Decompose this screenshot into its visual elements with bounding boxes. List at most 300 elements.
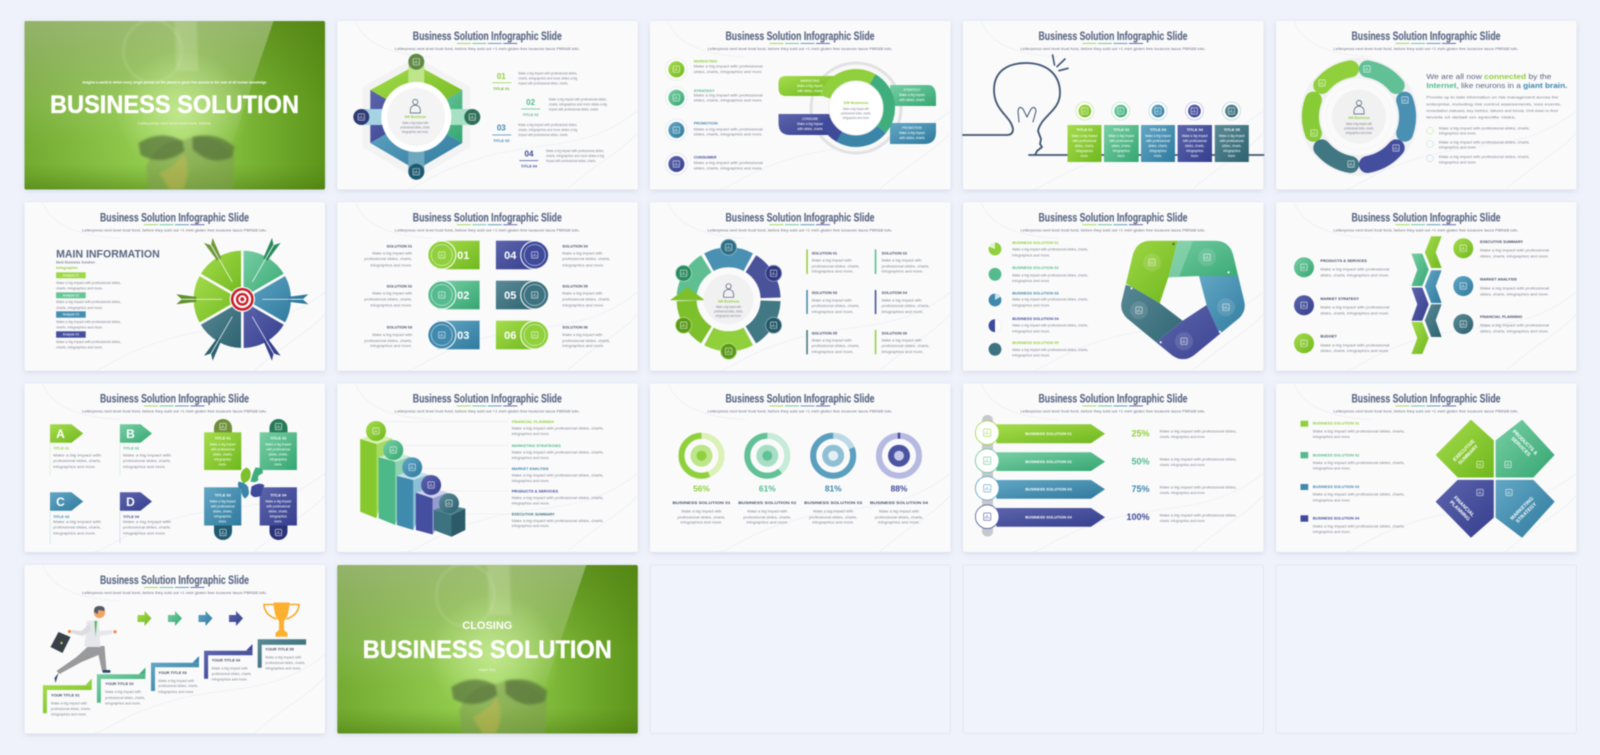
list: strategy [665,87,763,109]
title 02 box: TITLE 02 [1113,127,1130,132]
executive summary: Make a big impact with professional [1480,249,1549,253]
pie bullet 05: Make a big impact with professional slides, charts, [1012,348,1088,352]
solution 06 text: SOLUTION 06 [562,324,589,329]
solution 02 text: Make a big impact with [372,292,412,296]
title 01 box: more. [1080,154,1089,158]
donut 61%: Make a big impact with [747,510,787,514]
solution 05: SOLUTION 05 [812,330,838,335]
lightbulb outline [963,55,1264,155]
slide 5 header [1334,31,1519,51]
donut 88%: Make a big impact with [879,510,919,514]
step 04: YOUR TITLE 04 [212,658,241,663]
market analysis: MARKET ANALYSIS [1480,277,1517,282]
title 05 box: more. [1228,154,1236,158]
puzzle diagram: more. [219,520,227,524]
financial planning: Make a big impact with professional [1480,324,1549,328]
solution 05: infographics and more. [812,350,854,354]
item 02 [521,98,607,117]
main information heading: MAIN INFORMATION [56,248,160,260]
slide 4 header: Business Solution Infographic Slide [1038,31,1188,43]
solution 01: SOLUTION 01 [812,250,838,255]
cycle ring chart: infographics and more. [716,314,742,318]
slide 6: target and arrows [24,202,325,371]
bar 25%: 25% [1131,428,1150,438]
donut 81%: infographics and more. [812,521,854,525]
donut 61%: BUSINESS SOLUTION 02 [738,500,797,505]
financial planning text: infographics and more. [512,432,550,436]
bar 50%: charts, infographics and more. [1160,463,1206,467]
analysis 04: charts, infographics and more. [56,345,103,349]
step 01: Make a big impact with [51,702,87,706]
block 04: 04 [504,250,517,262]
solution 06 text: professional slides, charts, [562,339,610,343]
solution 02 text: infographics and more. [370,303,412,307]
target wheel [176,238,308,361]
solution 01: infographics and more. [812,270,854,274]
solution 06: Make a big impact with [882,338,922,342]
market analysis: Make a big impact with professional [1480,286,1549,290]
diamond executive summary: EXECUTIVE [1452,438,1477,463]
analysis 01 [56,272,121,290]
solution 06 text [562,324,610,348]
item 02: 02 [526,98,536,107]
statement body: enterprise, including risk control assessments, loss events, [1426,102,1561,106]
bar 25%: charts, infographics and more. [1160,435,1206,439]
step 05: infographics and more. [265,666,301,670]
bar 25%: Make a big impact with professional slides, [1160,430,1237,434]
pie bullet 04: BUSINESS SOLUTION 04 [1012,316,1060,321]
tag C: infographics and more. [53,532,96,536]
bar 75%: Make a big impact with professional slides, [1160,486,1237,490]
step 03 [151,656,199,694]
bar 50%: BUSINESS SOLUTION 02 [1025,459,1073,464]
checklist: infographics and more. [1439,145,1477,149]
donut 88%: BUSINESS SOLUTION 04 [870,500,929,505]
list item 02 [1300,452,1405,471]
step 02: professional slides, charts, [105,696,145,700]
step 03: Make a big impact with [158,679,194,683]
market strategy: slides, charts, infographics and more. [1320,311,1389,315]
tag C: Make a big impact with [53,520,101,524]
arrows into target [176,238,308,361]
marketing strategies text: Make a big impact with professional slides, charts, [512,450,604,454]
slide 4 header [1020,31,1206,51]
solution 06 text: infographics and more. [562,344,604,348]
block 02: 02 [457,290,469,302]
solution 06: infographics and more. [882,350,924,354]
bar 100%: charts, infographics and more. [1160,519,1206,523]
slide 3 header [708,31,893,51]
pie bullet 04: Make a big impact with professional slides, charts, [1012,324,1088,328]
title 04 box: TITLE 04 [1187,127,1204,132]
slide 14 header: Letterpress next level trust fund, before they sold out +1 meh gluten free locavore tacos PBR&B tofu. [1020,410,1206,414]
donut 61%: 61% [759,484,776,494]
block 03: 03 [457,330,469,342]
slide 7 header: Letterpress next level trust fund, before they sold out +1 meh gluten free locavore tacos PBR&B tofu. [395,229,580,233]
slide 15 header [1334,394,1519,414]
tag C: professional slides, charts, [53,526,101,530]
solution 01 [806,249,860,274]
solution 04 text: Make a big impact with [562,251,602,255]
tag C: TITLE 03 [53,514,70,519]
diamond products and services: PRODUCTS & [1511,429,1539,457]
vertical spine [982,415,993,536]
slide 13 header [708,394,893,414]
circular band diagram: SW Business [844,100,868,105]
puzzle diagram: slides, charts, [269,452,288,456]
tag C [50,492,101,544]
list: marketing: slides, charts, infographics and more. [694,70,763,74]
solution 01: professional slides, charts, [812,264,860,268]
marketing strategies text [512,443,604,460]
block 05: 05 [504,290,516,302]
marketing strategies text: infographics and more. [512,456,550,460]
slide 5: ring with statement [1276,21,1576,190]
slide 7 header: Business Solution Infographic Slide [413,212,562,224]
step 05 [258,639,306,670]
slide 13 header: Business Solution Infographic Slide [726,394,874,406]
ring chart: professional slides, charts, [1344,126,1374,130]
slide 4: lightbulb head [963,21,1264,190]
products and services text: Make a big impact with professional slides, charts, [512,496,604,500]
block 02 [428,281,480,309]
analysis 02: Analysis 02 [63,293,79,297]
financial planning: slides, charts, infographics and more. [1480,330,1549,334]
main information heading [56,248,160,270]
title 01 box: TITLE 01 [1076,127,1093,132]
tag C: C [56,495,65,509]
slide 2 header: Letterpress next level trust fund, before they sold out +1 meh gluten free locavore tacos PBR&B tofu. [395,47,580,51]
tag D: infographics and more. [123,532,166,536]
financial planning text: FINANCIAL PLANNING [512,419,554,424]
cycle ring chart: professional slides, charts, [714,309,743,313]
tag A [50,424,101,476]
step 02: infographics and more. [105,702,141,706]
analysis 03: Make a big impact with professional slides, [56,320,121,324]
slide 15 header: Business Solution Infographic Slide [1352,394,1500,406]
bar 75%: BUSINESS SOLUTION 03 [1025,487,1073,492]
slide 2: hexagon [337,21,638,190]
center icon [410,99,420,113]
title 04 box: infographics [1186,149,1204,153]
solution 04: Make a big impact with [882,298,922,302]
list item 01 [1300,421,1405,439]
slide 16 header: Letterpress next level trust fund, before they sold out +1 meh gluten free locavore tacos PBR&B tofu. [82,591,267,595]
slide 3: overlapping circle bands [650,21,950,190]
market analysis text: Make a big impact with professional slides, charts, [512,474,604,478]
budget: Make a big impact with professional [1320,343,1390,347]
checklist: Make a big impact with professional slides, charts, [1439,126,1530,130]
executive summary: EXECUTIVE SUMMARY [1480,239,1523,244]
slide 12: 3D staircase bars [337,384,638,552]
circular band diagram: Make a big impact [797,84,823,88]
list item 03: BUSINESS SOLUTION 03 [1313,484,1360,489]
list: consumer: Make a big impact with professional [694,161,763,165]
title 04 box: slides, charts, [1185,144,1205,148]
cover tagline: Imagine a world in which every single person on the planet is given free access to the sum of all human knowledge [82,80,267,84]
tag D [120,492,171,544]
circular band diagram: Make a big impact [899,93,925,97]
financial planning text: Make a big impact with professional slides, charts, [512,426,604,430]
pentagon diagram [1120,240,1246,360]
bar 50%: 50% [1131,456,1150,466]
executive summary: slides, charts, infographics and more. [1480,254,1549,258]
closing title: BUSINESS SOLUTION [363,636,612,664]
pie bullet 01: Make a big impact with professional slides, charts, [1012,248,1088,252]
tag B: infographics and more. [123,465,166,469]
statement body: remediation statuses, key metrics, failures and trends. Drill down to finer [1426,109,1559,113]
title 01 box [1068,125,1102,162]
market analysis text [512,466,604,483]
arrows row [138,611,243,626]
tag B: Make a big impact with [123,454,171,458]
step 02: Make a big impact with [105,690,141,694]
products and services text: PRODUCTS & SERVICES [512,489,559,494]
title 05 box: infographics [1223,149,1241,153]
step 01: YOUR TITLE 01 [51,692,80,697]
diamond marketing strategy: MARKETING [1509,496,1535,522]
circular band diagram: Make a big impact [797,122,823,126]
statement heading: We are all now connected by the [1426,72,1551,81]
tag B: professional slides, charts, [123,459,171,463]
list: strategy: slides, charts, infographics and more. [694,98,763,102]
slide 12 header: Letterpress next level trust fund, before they sold out +1 meh gluten free locavore tacos PBR&B tofu. [395,410,580,414]
solution 02: infographics and more. [882,270,924,274]
donut 81%: BUSINESS SOLUTION 03 [804,500,863,505]
title 02 box [1104,125,1139,162]
solution 05: professional slides, charts, [812,344,860,348]
tag D: D [126,495,135,509]
slide 12 header: Business Solution Infographic Slide [413,394,562,406]
item 04: impact with professional slides, charts. [546,159,596,163]
title 02 box: with professional [1109,139,1133,143]
puzzle diagram: Make a big impact [210,442,236,446]
step 04: professional slides, charts, [212,672,252,676]
slide 7: six solutions [337,202,638,371]
hexagon chart: SW Business [405,115,426,119]
circular band diagram: professional slides, charts, [841,112,871,116]
item 01: TITLE 01 [493,86,510,91]
slide 8 header: Letterpress next level trust fund, before they sold out +1 meh gluten free locavore tacos PBR&B tofu. [708,229,893,233]
puzzle diagram: infographics [270,458,287,462]
slide 8: cycle ring [650,202,950,371]
solution 03 text: Make a big impact with [372,333,412,337]
market analysis text: infographics and more. [512,479,550,483]
title 05 box: with professional [1220,139,1244,143]
solution 04 text [562,243,610,267]
slide 3 header: Letterpress next level trust fund, before they sold out +1 meh gluten free locavore tacos PBR&B tofu. [708,47,893,51]
step 03: YOUR TITLE 03 [158,670,188,675]
slide 5 header: Letterpress next level trust fund, before they sold out +1 meh gluten free locavore tacos PBR&B tofu. [1334,47,1519,51]
puzzle diagram: slides, charts, [213,510,233,514]
title 01 box: slides, charts, [1075,144,1094,148]
step 02 [97,668,145,706]
puzzle diagram: Make a big impact [265,442,291,446]
slide 15: diamond quadrants [1276,384,1576,552]
donut 81%: 81% [825,484,842,494]
list item 02: Make a big impact with professional slides, charts, [1313,461,1405,465]
title 02 box: Make a big impact [1108,134,1134,138]
pie bullet 03: Make a big impact with professional slides, charts, [1012,298,1088,302]
step 04 [204,644,252,682]
analysis 01: Analysis 01 [63,273,79,277]
slide 1: cover [24,20,325,190]
solution 02: professional slides, charts, [882,264,930,268]
puzzle diagram: more. [274,520,282,524]
solution 06 text: Make a big impact with [562,333,602,337]
solution 01: Make a big impact with [812,258,852,262]
pie bullet 04 [989,316,1088,334]
slide 16 header: Business Solution Infographic Slide [100,575,249,587]
slide 10 header: Letterpress next level trust fund, before they sold out +1 meh gluten free locavore tacos PBR&B tofu. [1334,229,1519,233]
puzzle diagram [204,419,297,540]
tag D: TITLE 04 [123,514,140,519]
slide 12 header [395,394,580,414]
tag D: Make a big impact with [123,520,171,524]
item 03 [492,123,577,143]
tag A: TITLE 01 [53,446,70,451]
slide 5 header: Business Solution Infographic Slide [1352,31,1500,43]
analysis 04: Analysis 04 [63,333,79,337]
tag A: professional slides, charts, [53,459,101,463]
item 02: Make a big impact with professional slides, [549,98,607,102]
running businessman [50,606,117,683]
financial planning [1453,314,1549,334]
puzzle diagram: TITLE 03 [215,492,232,498]
solution 05 text: Make a big impact with [562,292,602,296]
solution 04 [875,290,930,314]
list item 03: infographics and more. [1313,498,1351,502]
solution 06: SOLUTION 06 [882,330,908,335]
solution 03: infographics and more. [812,310,854,314]
title 03 box: with professional [1146,139,1170,143]
item 02: impact with professional slides, charts. [549,108,599,112]
analysis 01: Make a big impact with professional slides, [56,281,121,285]
item 02: charts, infographics and more slides a big [549,102,607,106]
solution 05 [806,330,860,354]
item 03: impact with professional slides, charts. [518,133,568,137]
cycle ring chart [670,239,782,359]
list: marketing [665,58,763,80]
market analysis text: MARKET ANALYSIS [512,466,549,471]
products and services: slides, charts, infographics and more. [1320,273,1389,277]
pie bullet 02 [989,265,1088,283]
ring chart [1310,66,1408,167]
hexagon chart: infographics and more. [402,130,429,134]
donut 61% [738,436,797,525]
block 01 [428,241,480,269]
list item 03 [1300,484,1405,502]
list item 03: Make a big impact with professional slides, charts, [1313,493,1405,497]
circular band diagram: Make a big impact with [843,107,869,111]
slide 14 header: Business Solution Infographic Slide [1038,394,1188,406]
item 03: Make a big impact with professional slides, [518,123,577,127]
pie bullet 02: infographics and more. [1012,279,1050,283]
pie bullet 05 [989,340,1088,358]
products and services text [512,489,604,506]
solution 05 text [562,283,610,307]
closing label: CLOSING [462,620,512,632]
analysis 02: Make a big impact with professional slides, [56,300,121,304]
title 03 box: infographics [1149,149,1167,153]
pie bullet 05: BUSINESS SOLUTION 05 [1012,340,1060,345]
list: marketing: MARKETING [694,58,717,63]
block 05 [496,281,549,309]
donut 81%: Make a big impact with [813,510,853,514]
donut 81%: professional slides, charts, [809,516,857,520]
step 02: YOUR TITLE 02 [105,681,134,686]
donut 88%: professional slides, charts, [875,516,923,520]
statement body: Provide up to date information on risk management across the [1426,96,1558,100]
slide 8 header: Business Solution Infographic Slide [726,212,874,224]
list: consumer: slides, charts, infographics and more. [694,167,763,171]
item 04 [519,149,604,168]
executive summary [1453,238,1549,258]
title 05 box: slides, charts, [1222,144,1242,148]
title 04 box: more. [1191,154,1199,158]
step 04: Make a big impact with [212,666,248,670]
market strategy: MARKET STRATEGY [1320,296,1359,301]
puzzle diagram: slides, charts, [213,452,233,456]
chevron spine chart [1411,236,1442,354]
puzzle diagram: more. [219,462,227,466]
list item 01: infographics and more. [1313,435,1351,439]
circular band diagram: STRATEGY [904,88,921,92]
products and services: PRODUCTS & SERVICES [1320,258,1367,263]
checklist: infographics and more. [1439,131,1477,135]
block 06 [496,321,549,349]
list item 02: infographics and more. [1313,467,1351,471]
tag B: B [126,427,135,441]
solution 02: Make a big impact with [882,258,922,262]
solution 05 text: professional slides, charts, [562,298,610,302]
donut 56%: 56% [693,484,710,494]
solution 01 text: Make a big impact with [372,251,412,255]
empty slide placeholders [650,565,1576,734]
bullseye [230,287,254,311]
pie bullet 04: infographics and more. [1012,330,1050,334]
pie bullet 01: BUSINESS SOLUTION 01 [1012,240,1060,245]
title 02 box: more. [1117,154,1125,158]
step 05: professional slides, charts, [265,661,305,665]
analysis 04: Make a big impact with professional slides, [56,340,121,344]
tag A: A [56,427,65,441]
list item 02: BUSINESS SOLUTION 02 [1313,452,1360,457]
step 01: infographics and more. [51,712,87,716]
donut 61%: infographics and more. [746,521,788,525]
statement body: levels of detail on specific risks. [1426,115,1516,119]
solution 01 text: SOLUTION 01 [387,243,413,248]
donut 88%: infographics and more. [878,521,920,525]
title 03 box: Make a big impact [1145,134,1171,138]
circular band diagram: CONSUME [802,117,818,121]
title 04 box [1178,125,1212,162]
solution 03 text: infographics and more. [370,344,412,348]
donut 88%: 88% [891,484,908,494]
list: consumer [665,153,763,175]
slide 7 header [395,212,580,232]
main information heading: Best Business Solution [56,260,95,264]
puzzle diagram: with professional [211,448,235,452]
solution 01 text: infographics and more. [370,263,412,267]
pie bullet 01: infographics and more. [1012,254,1050,258]
bar 50% [975,449,1237,472]
step 04: infographics and more. [212,678,248,682]
diamond products and services [1496,421,1554,477]
solution 03 text: SOLUTION 03 [387,324,413,329]
bar 25% [975,421,1237,444]
solution 01 text [364,243,413,267]
